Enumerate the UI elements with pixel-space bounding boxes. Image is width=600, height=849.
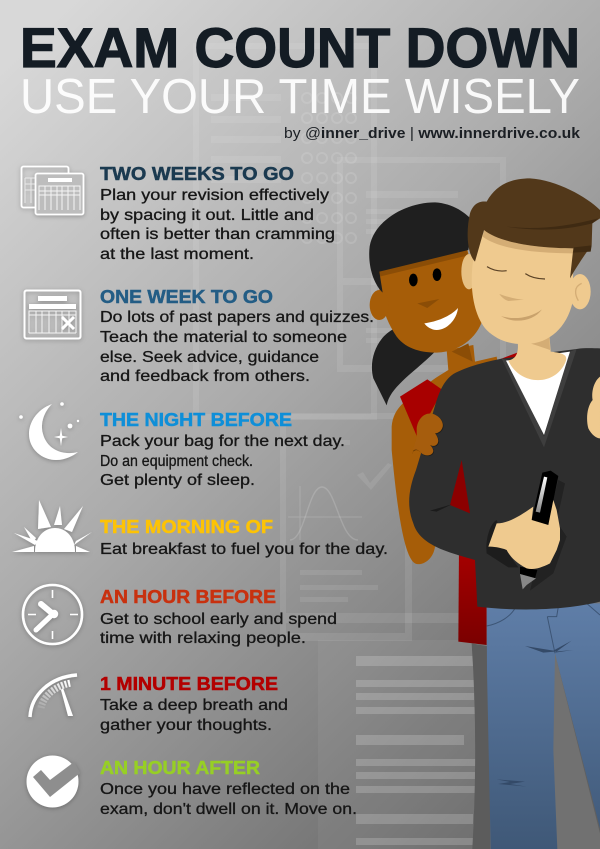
man shadow and legs — [472, 643, 490, 849]
document: multiple choice sheet — [193, 43, 377, 420]
section: an hour before — [23, 585, 337, 647]
text: after — [100, 781, 357, 818]
man fist — [587, 377, 600, 438]
text: night — [100, 433, 345, 489]
text: one week: and feedback from others. — [100, 368, 310, 385]
heading: two weeks to go: TWO WEEKS TO GO — [100, 163, 294, 184]
section: two weeks to go — [22, 163, 335, 263]
heading: an hour after: AN HOUR AFTER — [100, 757, 260, 778]
woman ponytail — [372, 328, 435, 405]
text: after: Once you have reflected on the — [100, 781, 350, 798]
text: after: exam, don't dwell on it. Move on. — [100, 801, 357, 818]
icon: calendars — [22, 166, 84, 214]
woman hand — [412, 414, 443, 455]
man eyes — [487, 267, 545, 279]
red gap — [450, 460, 470, 513]
text: night: Do an equipment check. — [100, 453, 253, 470]
text: night: Get plenty of sleep. — [100, 472, 255, 489]
icon: moon and stars — [19, 402, 79, 460]
sweater collar — [502, 349, 577, 447]
text: one week: Do lots of past papers and quizzes. — [100, 309, 374, 326]
woman head — [378, 247, 483, 353]
heading: the night before: THE NIGHT BEFORE — [100, 409, 292, 430]
man — [409, 178, 600, 849]
heading: 1 minute before: 1 MINUTE BEFORE — [100, 673, 278, 694]
man hand — [486, 500, 560, 569]
text: minute: Take a deep breath and — [100, 697, 288, 714]
text: hour before: time with relaxing people. — [100, 630, 306, 647]
section: the night before — [19, 402, 345, 489]
heading: the morning of: THE MORNING OF — [100, 516, 273, 537]
section: one week to go — [24, 286, 374, 385]
text: two weeks: often is better than cramming — [100, 226, 335, 243]
text: one week: else. Seek advice, guidance — [100, 349, 319, 366]
man shirt — [506, 352, 570, 435]
text: two weeks: at the last moment. — [100, 246, 254, 263]
icon: gauge — [30, 675, 77, 717]
section: an hour after — [26, 756, 357, 818]
woman body — [392, 345, 500, 564]
document: lined page — [318, 640, 478, 849]
icon: calendar with cross — [24, 290, 80, 338]
subtitle: USE YOUR TIME WISELY — [20, 70, 580, 124]
text: one week: Teach the material to someone — [100, 329, 347, 346]
heading: one week to go: ONE WEEK TO GO — [100, 286, 273, 307]
text: two weeks: Plan your revision effectively — [100, 187, 329, 204]
woman nose — [417, 299, 439, 308]
man nose — [499, 294, 524, 301]
text: hour before: Get to school early and spend — [100, 611, 337, 628]
icon: rising sun — [12, 500, 92, 552]
illustration: couple — [369, 178, 600, 849]
text: two weeks — [100, 187, 335, 263]
icon: check mark — [26, 756, 80, 808]
section: 1 minute before — [30, 673, 288, 734]
background documents — [193, 43, 506, 849]
document: revision sheet — [337, 157, 506, 372]
title: EXAM COUNT DOWN — [20, 16, 580, 79]
text: morning: Eat breakfast to fuel you for the day. — [100, 541, 388, 558]
text: two weeks: by spacing it out. Little and — [100, 207, 314, 224]
woman eyes — [409, 274, 418, 286]
text: hour before — [100, 611, 337, 647]
man face — [472, 227, 574, 344]
man hair — [468, 178, 600, 278]
woman red top — [400, 379, 443, 437]
heading: an hour before: AN HOUR BEFORE — [100, 586, 276, 607]
man jeans — [487, 603, 600, 849]
man sweater — [409, 348, 600, 609]
byline: by @inner_drive | www.innerdrive.co.uk — [284, 125, 581, 142]
marker pen — [520, 471, 567, 591]
text: minute — [100, 697, 288, 734]
man ears — [461, 254, 477, 289]
document: chart sheet — [280, 413, 460, 641]
text: night: Pack your bag for the next day. — [100, 433, 345, 450]
man smile — [501, 309, 542, 321]
woman hair — [369, 202, 473, 293]
woman — [369, 202, 522, 645]
section: the morning of — [12, 500, 388, 558]
icon: clock — [23, 585, 82, 644]
man neck — [508, 333, 566, 380]
text: minute: gather your thoughts. — [100, 717, 272, 734]
text: one week — [100, 309, 374, 385]
woman smile — [424, 308, 458, 330]
